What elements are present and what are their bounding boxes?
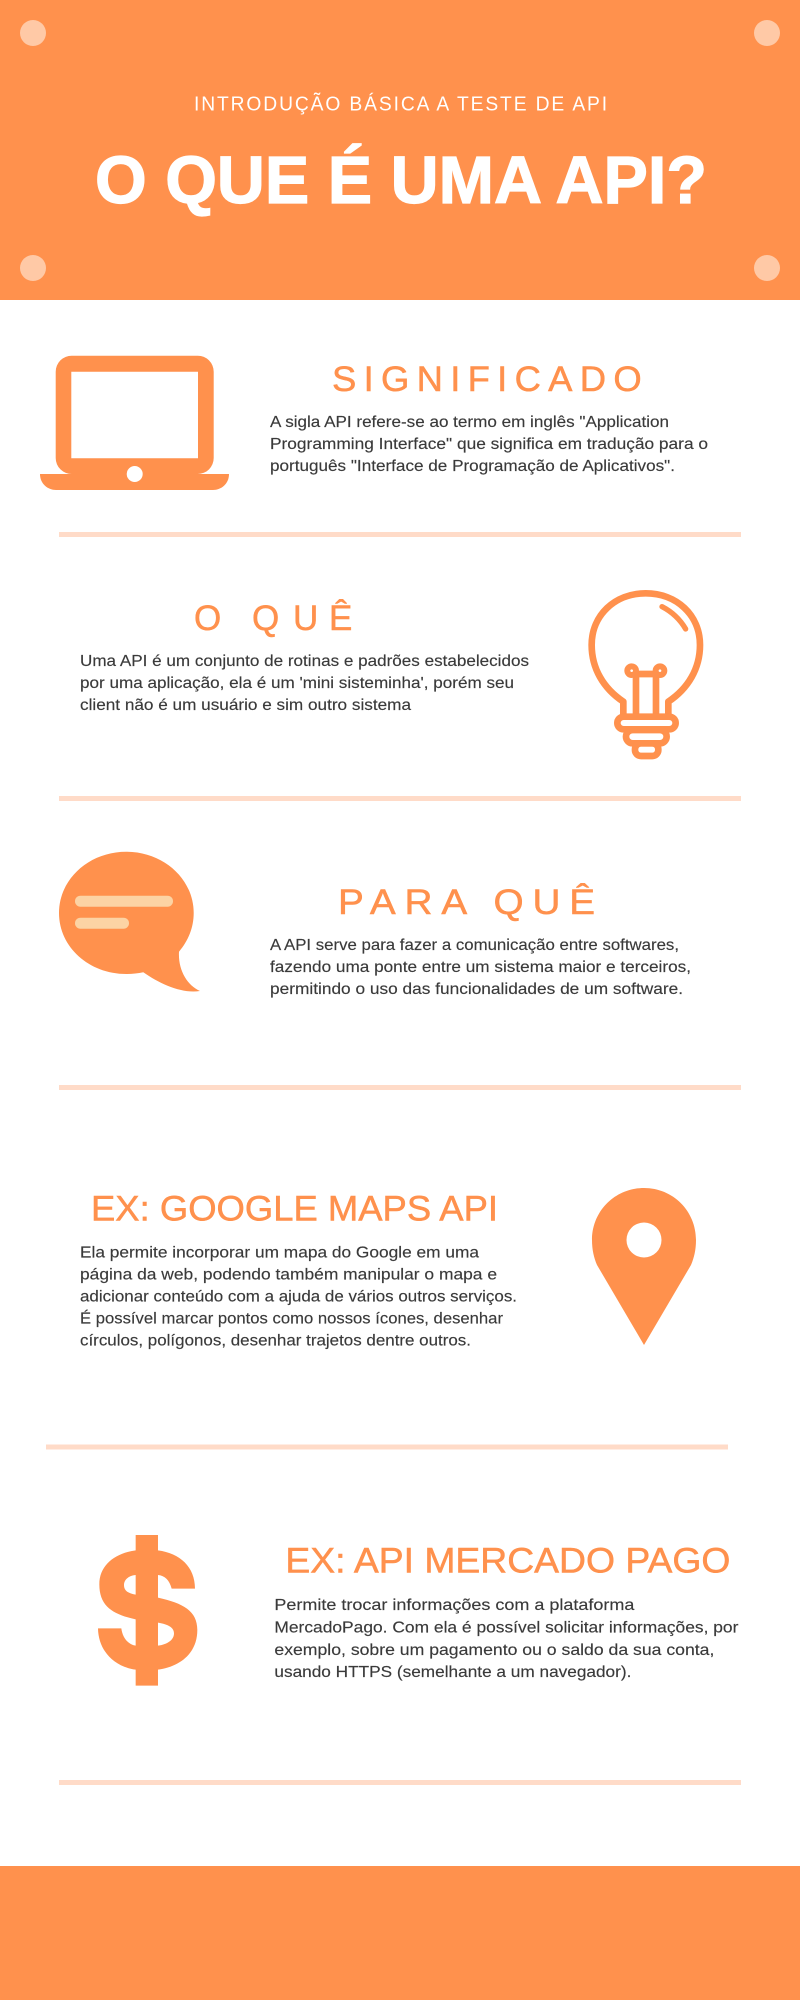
panel: header banner xyxy=(0,0,800,300)
text: o quê xyxy=(80,653,529,714)
heading: mercado pago: EX: API MERCADO PAGO xyxy=(285,1542,730,1580)
text: significado xyxy=(270,414,708,475)
text: google maps api: Ela permite incorporar um mapa do Google em uma xyxy=(80,1244,479,1262)
panel: para quê xyxy=(59,852,691,998)
icon: light bulb xyxy=(592,593,700,756)
text: google maps api: círculos, polígonos, desenhar trajetos dentre outros. xyxy=(80,1332,471,1350)
text: significado: A sigla API refere-se ao termo em inglês "Application xyxy=(270,414,669,431)
heading: google maps api: EX: GOOGLE MAPS API xyxy=(91,1190,498,1228)
icon: speech bubble xyxy=(59,852,200,992)
text: significado: Programming Interface" que significa em tradução para o xyxy=(270,436,708,453)
panel: mercado pago xyxy=(98,1535,739,1686)
text: mercado pago: exemplo, sobre um pagamento ou o saldo da sua conta, xyxy=(274,1642,714,1659)
text: para quê: permitindo o uso das funcionalidades de um software. xyxy=(270,981,683,998)
text: google maps api: adicionar conteúdo com a ajuda de vários outros serviços. xyxy=(80,1288,517,1306)
panel: significado xyxy=(40,356,708,490)
text: o quê: Uma API é um conjunto de rotinas e padrões estabelecidos xyxy=(80,653,529,670)
text: mercado pago: usando HTTPS (semelhante a um navegador). xyxy=(274,1664,631,1681)
icon: map pin xyxy=(592,1188,696,1345)
panel: footer band xyxy=(0,1866,800,2000)
text: para quê: A API serve para fazer a comunicação entre softwares, xyxy=(270,937,679,954)
panel: google maps api xyxy=(80,1188,696,1350)
text: mercado pago xyxy=(274,1597,739,1681)
icon: laptop xyxy=(40,356,229,490)
subtitle: INTRODUÇÃO BÁSICA A TESTE DE API xyxy=(194,92,609,116)
text: google maps api xyxy=(80,1244,517,1350)
text: mercado pago: Permite trocar informações com a plataforma xyxy=(274,1597,635,1614)
text: significado: português "Interface de Programação de Aplicativos". xyxy=(270,458,675,475)
heading: o quê: O QUÊ xyxy=(194,599,352,638)
text: o quê: client não é um usuário e sim outro sistema xyxy=(80,697,411,714)
text: mercado pago: MercadoPago. Com ela é possível solicitar informações, por xyxy=(274,1620,739,1636)
heading: para quê: PARA QUÊ xyxy=(338,883,604,922)
title: O QUE É UMA API? xyxy=(95,143,707,218)
text: para quê xyxy=(270,937,691,998)
text: google maps api: É possível marcar pontos como nossos ícones, desenhar xyxy=(80,1308,504,1328)
heading: significado: SIGNIFICADO xyxy=(332,360,649,399)
icon: dollar sign xyxy=(98,1535,197,1686)
text: para quê: fazendo uma ponte entre um sistema maior e terceiros, xyxy=(270,959,691,976)
panel: o quê xyxy=(80,593,700,756)
text: google maps api: página da web, podendo também manipular o mapa e xyxy=(80,1266,497,1284)
text: o quê: por uma aplicação, ela é um 'mini sisteminha', porém seu xyxy=(80,675,514,692)
